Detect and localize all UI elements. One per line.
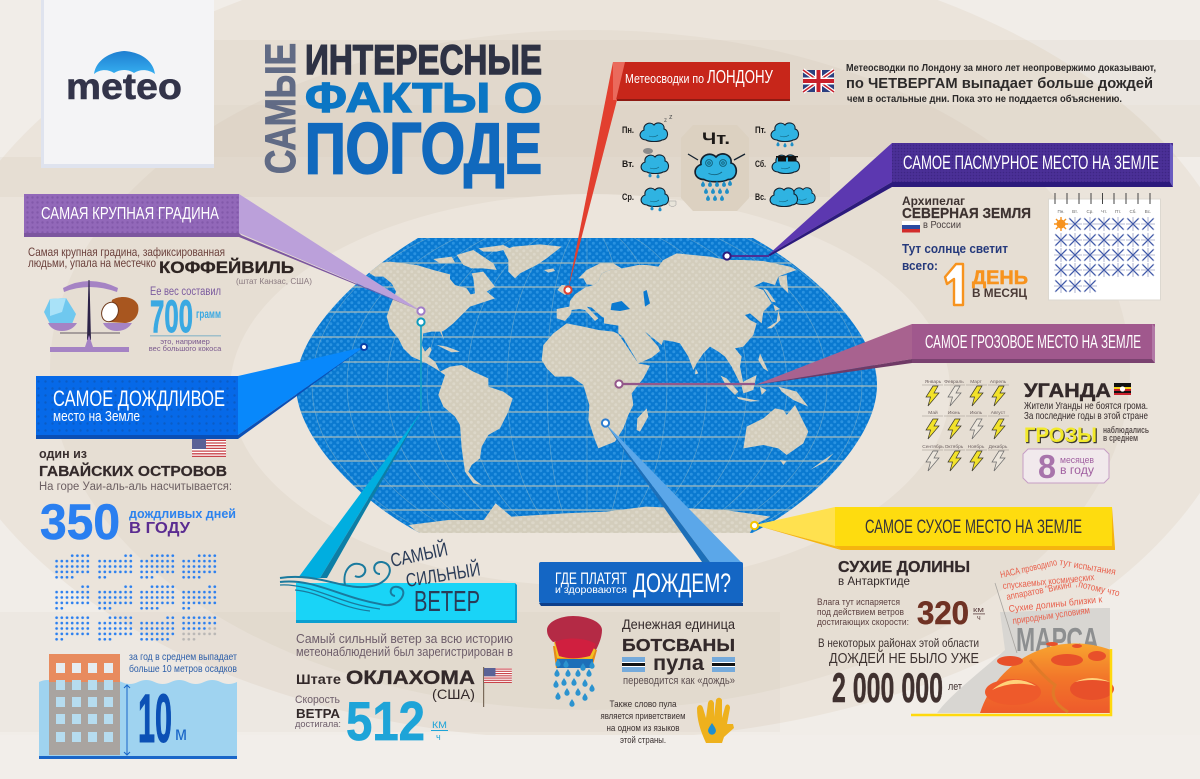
stat: 2 000 000 years: ДОЖДЕЙ НЕ БЫЛО УЖЕ	[829, 649, 979, 667]
heading: strongest wind: ВЕТЕР	[414, 586, 480, 618]
stat: 1 day a month: В МЕСЯЦ	[972, 286, 1027, 300]
text: Oklahoma: ОКЛАХОМА	[346, 667, 475, 689]
heading: strongest wind: САМЫЙ	[388, 538, 450, 572]
chart: storm months: Июль	[970, 410, 983, 416]
stat: 512 km/h: Скорость	[295, 694, 340, 706]
text: dry valleys: под действием ветров	[817, 607, 904, 618]
banner: rainiest	[36, 376, 238, 439]
text: Uganda: Жители Уганды не боятся грома.	[1024, 400, 1148, 412]
text: NASA note: природным условиям	[1012, 605, 1091, 627]
text: Severnaya Zemlya	[902, 194, 1031, 273]
text: Severnaya Zemlya: Тут солнце светит	[902, 241, 1008, 256]
text: London fact: чем в остальные дни. Пока это не поддается объяснению.	[847, 93, 1122, 105]
text: Uganda: ГРОЗЫ	[1024, 424, 1097, 447]
flag: USA on pole	[483, 667, 512, 707]
text: Severnaya Zemlya: СЕВЕРНАЯ ЗЕМЛЯ	[902, 205, 1031, 222]
text: NASA note: тут испытания	[1058, 557, 1117, 578]
panel: paying with rain	[539, 423, 743, 746]
chart: calendar: Чт.	[1101, 209, 1107, 214]
text: greeting note: является приветствием	[600, 711, 686, 722]
stat: 350 rainy days: 350	[40, 494, 120, 550]
stat: 2 000 000 years: лет	[948, 681, 962, 693]
stat: 320 km/h: 320	[917, 595, 969, 631]
chart: 10 metre water level: м	[175, 724, 187, 745]
text: Uganda: УГАНДА	[1024, 380, 1111, 402]
text: Uganda: ГРОЗЫ	[1025, 425, 1098, 448]
stat: 2 000 000 years: 2 000 000	[832, 664, 943, 711]
banner: rainiest: место на Земле	[53, 409, 140, 425]
banner: rain money: ДОЖДЕМ?	[633, 568, 731, 598]
stat: 700 gram: грамм	[196, 307, 221, 321]
icon: wind swirls	[280, 562, 403, 611]
week day clouds: Пн.	[622, 125, 634, 136]
chart: calendar: Вс.	[1145, 209, 1151, 214]
icon: scales with ice and coconut	[44, 280, 138, 352]
week day clouds: z	[669, 114, 673, 121]
chart: calendar: Ср.	[1086, 209, 1094, 214]
text: Uganda: За последние годы в этой стране	[1024, 410, 1148, 422]
icon: umbrella	[94, 51, 155, 74]
stat: 2 000 000 years	[818, 636, 979, 711]
chart: storm months: Февраль	[944, 379, 964, 385]
stat: 320 km/h: км	[973, 607, 984, 614]
text: hail description: Самая крупная градина, зафиксированная	[28, 245, 225, 259]
pointer: hail	[236, 194, 421, 311]
week day clouds: Вт.	[622, 159, 634, 170]
highlight: Thursday tile: Чт.	[702, 129, 730, 148]
panel: driest place	[755, 507, 1121, 715]
text: greeting note: Также слово пула	[610, 699, 677, 710]
text: Hawaii: один из	[39, 447, 87, 461]
chart: storm months: Декабрь	[989, 444, 1008, 450]
icon: Thursday cloud	[688, 154, 745, 201]
text: Hawaii: ГАВАЙСКИХ ОСТРОВОВ	[39, 462, 227, 480]
inland seas	[611, 290, 650, 311]
heading: strongest wind	[388, 538, 482, 618]
chart: 10 metre water level	[39, 651, 237, 759]
text: Uganda: в среднем	[1103, 433, 1138, 443]
continents: Old World	[542, 253, 808, 465]
stat: 700 gram: это, например	[160, 337, 210, 346]
illustration: Mars: МАРСА	[1016, 621, 1099, 658]
stat: 8 months	[1023, 448, 1109, 485]
stat: 512 km/h: 512	[346, 690, 425, 752]
panel: London	[568, 62, 1156, 290]
text: London fact: по ЧЕТВЕРГАМ выпадает больше дождей	[846, 75, 1153, 92]
text: Oklahoma	[296, 667, 475, 702]
text: Oklahoma: Штате	[296, 672, 342, 687]
chart: rainy day dots	[54, 553, 217, 642]
stat: 320 km/h: ч	[977, 615, 981, 622]
week day clouds: Пт.	[755, 125, 766, 136]
chart: storm months: Сентябрь	[922, 444, 944, 450]
text: Botswana: переводится как «дождь»	[623, 675, 735, 687]
pointer: wind	[298, 322, 421, 578]
text: NASA note: НАСА проводило	[999, 557, 1058, 581]
chart: calendar: Сб.	[1129, 209, 1137, 214]
text: Severnaya Zemlya: Архипелаг	[902, 194, 965, 208]
icon: sun	[1054, 217, 1068, 231]
text: wind description: Самый сильный ветер за всю историю	[296, 632, 513, 646]
text: Botswana: пула	[653, 652, 704, 675]
title: ФАКТЫ О	[305, 74, 542, 121]
text: greeting note: на одном из языков	[606, 723, 680, 734]
flag: UK	[803, 70, 834, 92]
chart: 10 metre water level: больше 10 метров осадков	[129, 663, 237, 675]
banner: hail	[24, 194, 243, 237]
chart: calendar	[1048, 193, 1160, 300]
chart: calendar: Пн.	[1058, 209, 1064, 214]
banner: hail: САМАЯ КРУПНАЯ ГРАДИНА	[41, 203, 219, 223]
text: London fact	[846, 62, 1156, 105]
stat: 512 km/h: КМ	[432, 720, 447, 730]
text: greeting note	[600, 699, 686, 746]
text: Severnaya Zemlya: всего:	[902, 258, 938, 273]
pointer: driest	[755, 507, 841, 550]
text: Uganda: наблюдались	[1103, 425, 1149, 435]
stat: 350 rainy days	[40, 494, 236, 550]
map markers	[361, 252, 758, 529]
text: Botswana	[622, 616, 735, 687]
week day clouds: Ср.	[622, 192, 634, 203]
text: dry valleys	[817, 559, 970, 628]
stat: 8 months: в году	[1060, 463, 1094, 477]
week day clouds: Сб.	[755, 159, 766, 170]
text: greeting note: этой страны.	[620, 735, 666, 746]
text: dry valleys: достигающих скорости:	[817, 617, 909, 628]
stat: 8 months: 8	[1038, 448, 1056, 485]
chart: storm months: Август	[991, 410, 1006, 416]
chart: calendar: Пт.	[1115, 209, 1121, 214]
panel: strongest wind	[280, 322, 517, 752]
text: hail description: людьми, упала на местечко	[28, 256, 156, 270]
text: NASA note: Сухие долины близки к	[1008, 594, 1104, 615]
text: hail description: КОФФЕЙВИЛЬ	[159, 258, 294, 277]
banner: rain money	[539, 562, 743, 606]
banner: rain money: и здороваются	[555, 585, 627, 596]
stat: 700 gram: 700	[150, 291, 193, 342]
banner: rainiest: САМОЕ ДОЖДЛИВОЕ	[53, 386, 225, 411]
week day clouds: z	[664, 118, 667, 124]
icon: hand with drop	[697, 698, 734, 743]
continents: Americas	[361, 244, 562, 485]
illustration: Mars	[911, 583, 1114, 715]
text: wind description	[296, 632, 513, 659]
banner: cloudiest	[892, 143, 1173, 187]
week day clouds: Вс.	[755, 192, 766, 203]
chart: storm months	[922, 379, 1009, 471]
continents: Antarctica and New Zealand	[409, 453, 834, 535]
world map	[296, 238, 877, 533]
stat: 350 rainy days: В ГОДУ	[129, 520, 191, 537]
heading: strongest wind: СИЛЬНЫЙ	[404, 558, 482, 592]
chart: 10 metre water level: за год в среднем выпадает	[129, 651, 237, 663]
banner: London: Метеосводки по	[625, 72, 704, 86]
stat: 2 000 000 years: В некоторых районах этой области	[818, 636, 979, 650]
banner: driest	[835, 507, 1115, 550]
text: Oklahoma: (США)	[432, 686, 475, 702]
flag: USA	[192, 439, 226, 457]
stat: 8 months: месяцев	[1060, 455, 1094, 466]
text: hail description	[28, 245, 312, 286]
panel: hail	[24, 194, 421, 353]
chart: storm months: Апрель	[990, 379, 1007, 385]
text: Uganda	[1024, 380, 1149, 448]
chart: storm months: Январь	[925, 379, 942, 385]
title: ИНТЕРЕСНЫЕ	[305, 36, 542, 83]
chart: storm months: Май	[928, 409, 938, 416]
text: Botswana: БОТСВАНЫ	[622, 635, 735, 655]
panel: rainiest place	[36, 347, 364, 759]
banner: London	[613, 62, 790, 101]
panel: cloudiest place	[727, 143, 1173, 305]
stat: 350 rainy days: дождливых дней	[129, 506, 236, 521]
chart: calendar: Вт.	[1072, 209, 1078, 214]
text: hail description: (штат Канзас, США)	[236, 276, 312, 286]
text: London fact: Метеосводки по Лондону за много лет неопровержимо доказывают,	[846, 62, 1156, 74]
stat: 512 km/h: ВЕТРА	[296, 707, 340, 721]
pointer: London	[568, 62, 617, 290]
chart: storm months: Июнь	[948, 410, 961, 416]
chart: storm months: Март	[970, 379, 983, 385]
title: САМЫЕ	[257, 43, 305, 174]
chart: storm months: Ноябрь	[968, 444, 985, 450]
logo wordmark: meteo	[66, 66, 182, 107]
text: wind description: метеонаблюдений был зарегистрирован в	[296, 645, 513, 659]
banner: London: ЛОНДОНУ	[707, 67, 773, 87]
text: Botswana: Денежная единица	[622, 616, 735, 632]
stat: 1 day a month	[945, 264, 1028, 305]
banner: thunder	[912, 324, 1155, 363]
text: NASA note	[999, 557, 1121, 627]
icon: wallet with rain	[547, 616, 602, 707]
week day clouds	[622, 114, 815, 211]
logo card	[41, 0, 214, 168]
stat: 512 km/h: достигала:	[295, 719, 341, 730]
banner: driest: САМОЕ СУХОЕ МЕСТО НА ЗЕМЛЕ	[865, 517, 1082, 538]
stat: 700 gram: вес большого кокоса	[149, 344, 222, 353]
pointer: cloudiest	[727, 143, 892, 256]
text: dry valleys: СУХИЕ ДОЛИНЫ	[838, 559, 970, 576]
panel: thunderstorms	[619, 324, 1155, 485]
stat: 700 gram: Ее вес составил	[150, 286, 221, 298]
pointer: thunder	[619, 324, 912, 385]
text: dry valleys: Влага тут испаряется	[817, 597, 900, 608]
stat: 512 km/h	[295, 690, 448, 752]
text: NASA note: аппаратов "Викинг",	[1005, 578, 1078, 603]
banner: wind	[296, 583, 517, 623]
stat: 1 day a month: ДЕНЬ	[972, 268, 1028, 289]
title: ПОГОДЕ	[305, 110, 542, 189]
text: NASA note: потому что	[1077, 579, 1121, 599]
banner: rain money: ГДЕ ПЛАТЯТ	[555, 569, 627, 588]
text: Severnaya Zemlya: в России	[923, 220, 961, 231]
chart: storm months: Октябрь	[945, 444, 964, 450]
text: Hawaii: На горе Уаи-аль-аль насчитывается:	[39, 481, 232, 493]
chart: 10 metre water level: 10	[138, 680, 172, 757]
title	[257, 36, 542, 189]
text: Hawaii	[39, 447, 232, 493]
pointer: rain money	[605, 423, 741, 562]
highlight: Thursday tile	[681, 125, 749, 211]
text: NASA note: спускаемых космических	[1002, 572, 1095, 592]
pointer: rainiest	[238, 347, 364, 439]
stat: 512 km/h: ч	[436, 732, 441, 742]
text: dry valleys: в Антарктиде	[838, 574, 910, 588]
